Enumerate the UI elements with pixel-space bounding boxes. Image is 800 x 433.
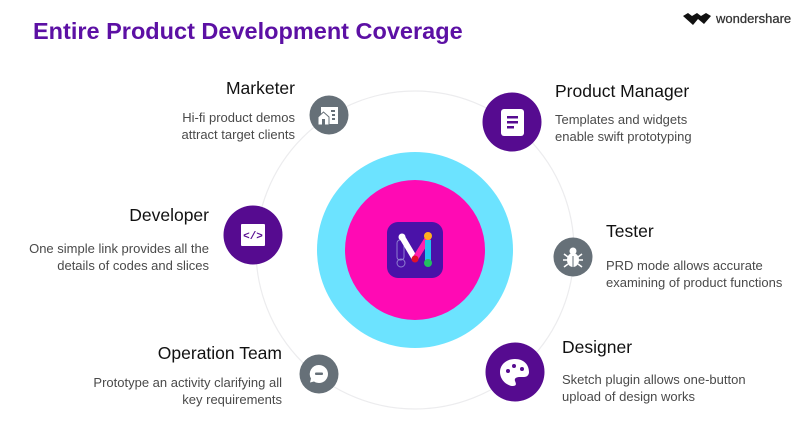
text: marketer: Marketer	[226, 78, 295, 98]
icon: developer	[224, 206, 282, 264]
icon: marketer	[310, 96, 348, 134]
orbit ring	[256, 91, 574, 409]
text: product manager: Product Manager	[555, 81, 689, 101]
text: designer	[562, 337, 746, 404]
title: Entire Product Development Coverage	[33, 18, 463, 44]
text: marketer: Hi-fi product demos	[182, 110, 295, 125]
icon: developer: </>	[243, 231, 263, 243]
text: developer: details of codes and slices	[57, 258, 209, 272]
logo: wondershare: wondershare	[716, 11, 791, 26]
text: tester: Tester	[606, 221, 654, 241]
text: product manager: enable swift prototyping	[555, 128, 692, 144]
text: marketer	[182, 78, 295, 142]
text: marketer: attract target clients	[182, 126, 295, 142]
text: operation team: key requirements	[182, 392, 282, 406]
text: designer: Designer	[562, 337, 632, 357]
text: product manager: Templates and widgets	[555, 112, 687, 127]
text: operation team: Prototype an activity clarifying all	[93, 375, 282, 390]
text: developer: One simple link provides all the	[29, 241, 209, 256]
text: tester: examining of product functions	[606, 274, 782, 290]
text: tester: PRD mode allows accurate	[606, 258, 763, 273]
text: product manager	[555, 81, 692, 144]
text: operation team: Operation Team	[158, 343, 282, 363]
icon: app logo	[387, 222, 443, 278]
text: designer: Sketch plugin allows one-button	[562, 372, 746, 387]
icon: product manager	[482, 92, 542, 152]
outer cyan circle	[317, 152, 513, 348]
text: developer	[29, 205, 209, 272]
text: designer: upload of design works	[562, 388, 695, 404]
icon: operation team	[300, 354, 338, 394]
text: tester	[606, 221, 782, 290]
icon: designer	[486, 342, 544, 402]
icon: tester	[554, 238, 592, 276]
text: developer: Developer	[129, 205, 209, 225]
text: operation team	[93, 343, 282, 406]
logo: wondershare	[683, 11, 791, 26]
inner magenta circle	[345, 180, 485, 320]
